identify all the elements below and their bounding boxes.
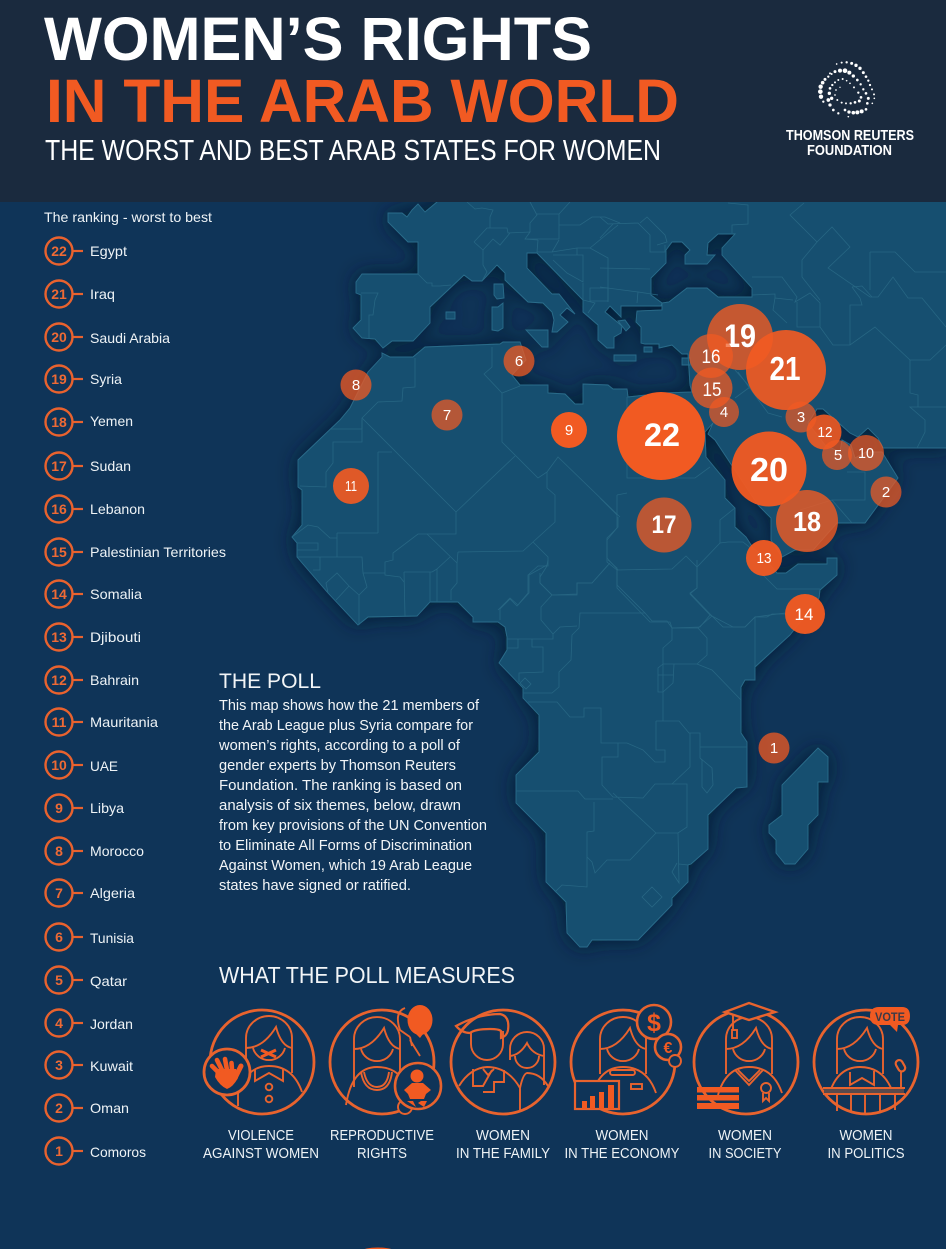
caption: women in politics bbox=[828, 1128, 904, 1162]
rank 22 bbox=[46, 238, 127, 264]
map bubble: 16 Lebanon: 16 bbox=[702, 347, 720, 368]
rank 16: 16 bbox=[51, 501, 67, 517]
map bubble: 8 Morocco bbox=[340, 370, 372, 400]
map bubble: 10 UAE: 10 bbox=[858, 445, 874, 462]
rank 6: 6 bbox=[55, 929, 63, 945]
caption: women in the family bbox=[456, 1128, 550, 1162]
rank 12: Bahrain bbox=[90, 672, 139, 688]
the poll text bbox=[218, 670, 487, 894]
rank 17: Sudan bbox=[90, 458, 131, 474]
rank 16: Lebanon bbox=[90, 501, 145, 517]
map bubble: 15 Palestinian Territories: 15 bbox=[702, 380, 722, 401]
map bubble: 3 Kuwait bbox=[786, 402, 816, 432]
map bubble: 17 Sudan bbox=[636, 498, 692, 552]
map bubble: 1 Comoros: 1 bbox=[770, 740, 778, 757]
rank 17: 17 bbox=[51, 458, 67, 474]
icon: reproductive rights bbox=[330, 1005, 441, 1114]
rank 20 bbox=[46, 324, 170, 350]
rank 9: Libya bbox=[90, 800, 124, 816]
map bubble: 18 Yemen bbox=[776, 490, 838, 552]
rank 2 bbox=[46, 1094, 129, 1122]
rank 5: 5 bbox=[55, 972, 63, 988]
rank 12: 12 bbox=[51, 672, 67, 688]
map bubble: 22 Egypt bbox=[617, 392, 705, 480]
caption: women in politics: WOMEN bbox=[840, 1128, 892, 1144]
rank 9: 9 bbox=[55, 800, 63, 816]
rank 20: 20 bbox=[51, 329, 67, 345]
rank 9 bbox=[46, 794, 124, 822]
caption: women in the family: IN THE FAMILY bbox=[456, 1146, 550, 1162]
caption: violence against women bbox=[203, 1128, 319, 1162]
rank 10 bbox=[46, 752, 118, 778]
rank 11: 11 bbox=[52, 714, 67, 730]
rank 2: 2 bbox=[55, 1100, 63, 1116]
ranking heading: The ranking - worst to best bbox=[44, 209, 212, 225]
rank 10: 10 bbox=[51, 757, 67, 773]
icon captions bbox=[203, 1128, 904, 1162]
rank 22: 22 bbox=[51, 243, 67, 259]
map bubble: 21 Iraq: 21 bbox=[770, 350, 800, 387]
map bubble: 3 Kuwait: 3 bbox=[797, 409, 805, 426]
rank 3 bbox=[46, 1052, 133, 1078]
poll paragraph bbox=[218, 698, 487, 894]
rank 20: Saudi Arabia bbox=[90, 330, 170, 346]
rank 15: Palestinian Territories bbox=[90, 544, 226, 560]
rank 18: Yemen bbox=[90, 413, 133, 429]
subtitle: THE WORST AND BEST ARAB STATES FOR WOMEN bbox=[45, 135, 661, 167]
rank 18 bbox=[46, 408, 133, 436]
rank 21: 21 bbox=[51, 286, 67, 302]
caption: women in society: IN SOCIETY bbox=[708, 1146, 782, 1162]
rank 16 bbox=[46, 496, 145, 522]
map bubble: 5 Qatar: 5 bbox=[834, 447, 842, 464]
poll paragraph: women’s rights, according to a poll of bbox=[218, 738, 461, 754]
map bubble: 9 Libya: 9 bbox=[565, 422, 573, 439]
rank 1: 1 bbox=[55, 1143, 63, 1159]
rank 8: 8 bbox=[55, 843, 63, 859]
map bubble: 4 Jordan bbox=[709, 397, 739, 427]
poll heading: THE POLL bbox=[219, 670, 321, 693]
rank 8 bbox=[46, 838, 144, 864]
map bubble: 20 Saudi Arabia bbox=[732, 432, 806, 506]
poll paragraph: gender experts by Thomson Reuters bbox=[219, 758, 456, 774]
rank 6: Tunisia bbox=[90, 930, 134, 946]
country borders bbox=[292, 202, 946, 907]
map bubble: 11 Mauritania: 11 bbox=[345, 478, 357, 495]
map bubble: 13 Djibouti: 13 bbox=[756, 550, 772, 567]
map bubble: 17 Sudan: 17 bbox=[652, 511, 676, 539]
icon: violence against women bbox=[204, 1010, 314, 1114]
map bubble: 18 Yemen: 18 bbox=[793, 506, 821, 537]
bottom edge orange mark bbox=[362, 1248, 394, 1249]
caption: women in the economy: WOMEN bbox=[596, 1128, 648, 1144]
map bubble: 2 Oman bbox=[870, 476, 902, 508]
map bubble: 16 Lebanon bbox=[689, 334, 733, 378]
poll paragraph: states have signed or ratified. bbox=[219, 878, 411, 894]
rank 4 bbox=[46, 1010, 133, 1036]
poll paragraph: to Eliminate All Forms of Discrimination bbox=[219, 838, 472, 854]
rank 17 bbox=[46, 452, 131, 480]
caption: women in society: WOMEN bbox=[718, 1128, 772, 1144]
icon: women in society bbox=[694, 1003, 798, 1114]
poll paragraph: the Arab League plus Syria compare for bbox=[219, 718, 473, 734]
rank 5: Qatar bbox=[90, 973, 127, 989]
rank 6 bbox=[46, 924, 134, 950]
map bubble: 6 Tunisia: 6 bbox=[515, 353, 523, 370]
map bubble: 12 Bahrain bbox=[806, 414, 842, 450]
map bubble: 11 Mauritania bbox=[333, 468, 369, 504]
rank 4: Jordan bbox=[90, 1016, 133, 1032]
icon: women in the economy: $ bbox=[647, 1009, 661, 1037]
icon: women in politics: VOTE bbox=[875, 1010, 905, 1024]
icon: women in the family bbox=[451, 1010, 555, 1114]
poll paragraph: Against Women, which 19 Arab League bbox=[219, 858, 472, 874]
rank 15: 15 bbox=[51, 544, 67, 560]
rank 3: Kuwait bbox=[90, 1058, 133, 1074]
map bubble: 19 Syria bbox=[707, 304, 773, 370]
logo: wordmark: THOMSON REUTERS bbox=[786, 128, 914, 144]
header band: FOUNDATION bbox=[807, 143, 892, 159]
title line 1: WOMEN’S RIGHTS bbox=[44, 5, 592, 73]
caption: reproductive rights: REPRODUCTIVE bbox=[330, 1128, 434, 1144]
rank 18: 18 bbox=[51, 414, 67, 430]
rank 12 bbox=[46, 666, 139, 694]
map bubble: 12 Bahrain: 12 bbox=[818, 424, 832, 441]
map bubble: 21 Iraq bbox=[746, 330, 826, 410]
map bubble: 9 Libya bbox=[551, 412, 587, 448]
rank 14 bbox=[46, 580, 142, 608]
caption: women in the family: WOMEN bbox=[476, 1128, 530, 1144]
caption: reproductive rights: RIGHTS bbox=[357, 1146, 407, 1162]
rank 5 bbox=[46, 966, 127, 994]
map bubble: 14 Somalia bbox=[785, 594, 825, 634]
rank 19 bbox=[46, 366, 122, 392]
rank 13: Djibouti bbox=[90, 629, 141, 645]
logo: swirl bbox=[818, 61, 875, 117]
map bubble: 14 Somalia: 14 bbox=[794, 605, 814, 624]
caption: women in society bbox=[708, 1128, 782, 1162]
map bubble: 13 Djibouti bbox=[746, 540, 782, 576]
rank 19: Syria bbox=[90, 371, 122, 387]
map bubble: 22 Egypt: 22 bbox=[644, 417, 680, 453]
icon: women in the economy: € bbox=[664, 1040, 673, 1057]
caption: reproductive rights bbox=[330, 1128, 434, 1162]
rank 11: Mauritania bbox=[90, 714, 158, 730]
rank 8: Morocco bbox=[90, 843, 144, 859]
rank 3: 3 bbox=[55, 1057, 63, 1073]
ranking list bbox=[44, 209, 226, 1164]
rank 21: Iraq bbox=[90, 286, 115, 302]
caption: women in the economy: IN THE ECONOMY bbox=[564, 1146, 680, 1162]
caption: women in the economy bbox=[564, 1128, 680, 1162]
rank 1 bbox=[46, 1138, 146, 1164]
caption: violence against women: AGAINST WOMEN bbox=[203, 1146, 319, 1162]
rank 7: Algeria bbox=[90, 885, 135, 901]
rank 11 bbox=[46, 708, 158, 736]
header band bbox=[0, 0, 946, 202]
rank 2: Oman bbox=[90, 1100, 129, 1116]
rank 22: Egypt bbox=[90, 243, 127, 259]
map bubble: 7 Algeria: 7 bbox=[443, 407, 451, 424]
map bubble: 8 Morocco: 8 bbox=[352, 377, 360, 394]
rank 10: UAE bbox=[90, 758, 118, 774]
rank 14: Somalia bbox=[90, 586, 142, 602]
poll paragraph: analysis of six themes, below, drawn bbox=[219, 798, 461, 814]
map bubble: 4 Jordan: 4 bbox=[720, 404, 728, 421]
map bubble: 10 UAE bbox=[848, 435, 884, 471]
map bubble: 20 Saudi Arabia: 20 bbox=[750, 451, 788, 488]
rank 13 bbox=[46, 624, 141, 650]
map bubble: 5 Qatar bbox=[822, 440, 852, 470]
caption: violence against women: VIOLENCE bbox=[228, 1128, 294, 1144]
rank 21 bbox=[46, 280, 115, 308]
rank 7: 7 bbox=[55, 885, 63, 901]
land masses bbox=[292, 195, 946, 947]
rank 19: 19 bbox=[51, 371, 67, 387]
map bubble: 15 Palestinian Territories bbox=[692, 368, 732, 408]
icon: women in politics bbox=[814, 1007, 918, 1114]
poll paragraph: Foundation. The ranking is based on bbox=[219, 778, 462, 794]
title line 2: IN THE ARAB WORLD bbox=[46, 67, 679, 135]
icon: women in the economy bbox=[571, 1005, 681, 1114]
map of Africa and Middle East bbox=[292, 195, 946, 947]
poll paragraph: from key provisions of the UN Convention bbox=[219, 818, 487, 834]
map bubble: 2 Oman: 2 bbox=[882, 484, 890, 501]
rank 14: 14 bbox=[51, 586, 67, 602]
rank 7 bbox=[46, 880, 135, 906]
rank 13: 13 bbox=[51, 629, 67, 645]
what the poll measures heading: WHAT THE POLL MEASURES bbox=[219, 962, 515, 988]
caption: women in politics: IN POLITICS bbox=[828, 1146, 904, 1162]
map bubble: 1 Comoros bbox=[758, 732, 790, 764]
map bubble: 19 Syria: 19 bbox=[724, 318, 756, 354]
map bubble: 7 Algeria bbox=[432, 400, 462, 430]
rank 4: 4 bbox=[55, 1015, 63, 1031]
map bubble: 6 Tunisia bbox=[504, 346, 534, 376]
rank 1: Comoros bbox=[90, 1144, 146, 1160]
poll paragraph: This map shows how the 21 members of bbox=[219, 698, 480, 714]
rank 15 bbox=[46, 538, 226, 566]
